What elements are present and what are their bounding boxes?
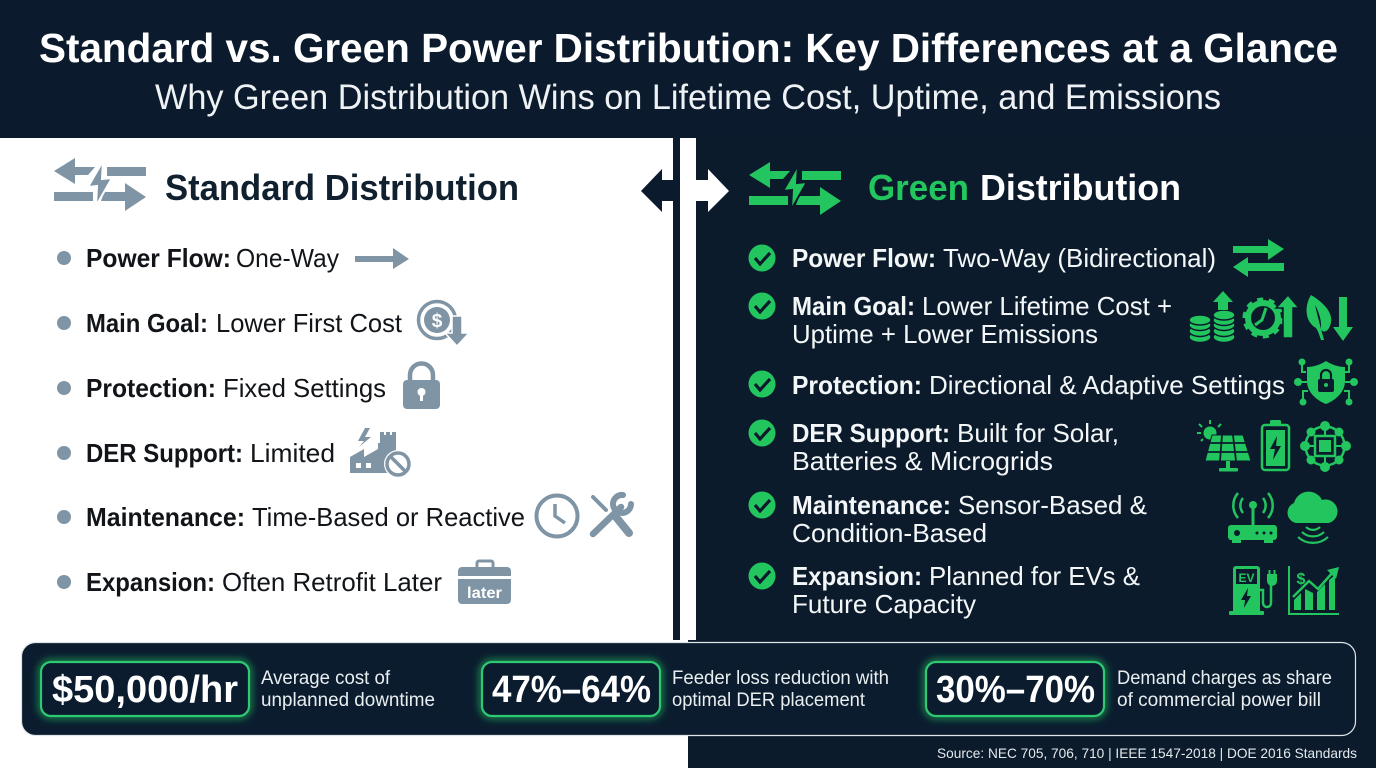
title: Standard vs. Green Power Distribution: Key Differences at a Glance — [39, 25, 1338, 71]
panel: standard list — [57, 243, 631, 604]
center divider with opposing arrows — [641, 138, 729, 640]
header band — [0, 0, 1376, 138]
row: main goal — [748, 291, 1172, 349]
row: protection: Protection: — [86, 373, 216, 403]
row: protection: Protection: — [792, 370, 922, 400]
icon: shield with lock and circuit nodes — [1295, 360, 1357, 404]
stat: feeder loss reduction — [482, 662, 889, 716]
stat: demand charges: 30%–70% — [936, 669, 1095, 711]
row: expansion: Expansion: — [792, 561, 922, 591]
row: maintenance: Maintenance: — [86, 502, 245, 532]
icon: later briefcase: later — [467, 585, 502, 602]
icon: two-way arrows — [1233, 239, 1284, 277]
row: protection: Directional & Adaptive Settings — [929, 370, 1285, 400]
icon: clock — [536, 496, 578, 536]
stat: downtime cost: $50,000/hr — [52, 669, 238, 711]
row: der support: Built for Solar, — [957, 418, 1119, 448]
icon: standard distribution arrows — [54, 158, 146, 211]
stat: feeder loss reduction: 47%–64% — [492, 669, 651, 711]
row: power flow: Power Flow: — [792, 243, 936, 273]
stat: downtime cost: unplanned downtime — [261, 690, 435, 711]
row: power flow — [748, 243, 1216, 273]
icon: wireless router — [1228, 493, 1277, 543]
row: expansion: Planned for EVs & — [929, 561, 1140, 591]
subtitle: Why Green Distribution Wins on Lifetime Cost, Uptime, and Emissions — [155, 78, 1221, 117]
stat: feeder loss reduction: Feeder loss reduction with — [672, 668, 889, 689]
heading: green distribution: Green — [868, 167, 969, 208]
row: maintenance — [57, 502, 525, 532]
icon: coin with down arrow: $ — [432, 311, 443, 332]
row: main goal: Main Goal: — [86, 308, 208, 338]
icon: later briefcase — [458, 561, 511, 604]
row: main goal — [57, 308, 403, 338]
icon: factory with prohibition sign — [350, 428, 412, 478]
row: der support — [748, 418, 1119, 476]
row: expansion — [57, 567, 442, 597]
row: protection: Fixed Settings — [223, 373, 386, 403]
row: der support: Batteries & Microgrids — [792, 446, 1053, 476]
stat: demand charges — [926, 662, 1332, 716]
icon: solar panel — [1197, 420, 1251, 472]
icon: coins with up arrow — [1189, 291, 1235, 342]
row: der support: Limited — [250, 438, 335, 468]
row: maintenance — [748, 490, 1147, 548]
row: expansion: Expansion: — [86, 567, 215, 597]
icon: microgrid chip network — [1300, 422, 1350, 472]
row: protection — [57, 373, 386, 403]
row: power flow: Two-Way (Bidirectional) — [943, 243, 1216, 273]
stat: downtime cost: Average cost of — [261, 668, 391, 689]
heading: green distribution: Distribution — [980, 167, 1181, 208]
row: expansion: Often Retrofit Later — [222, 567, 442, 597]
heading: green distribution — [868, 167, 1181, 208]
icon: padlock — [403, 364, 440, 409]
row: main goal: Main Goal: — [792, 291, 915, 321]
panel: right dark background — [688, 138, 1376, 768]
row: power flow: One-Way — [236, 243, 339, 273]
icon: leaf with down arrow — [1307, 295, 1353, 341]
row: der support: DER Support: — [86, 438, 243, 468]
source note: Source: NEC 705, 706, 710 | IEEE 1547-2018 | DOE 2016 Standards — [937, 745, 1357, 761]
row: expansion — [748, 561, 1140, 619]
stat: demand charges: of commercial power bill — [1117, 690, 1321, 711]
row: maintenance: Condition-Based — [792, 518, 987, 548]
icon: EV charger — [1229, 566, 1277, 615]
row: maintenance: Time-Based or Reactive — [252, 502, 525, 532]
row: der support — [57, 438, 335, 468]
stat: feeder loss reduction: optimal DER placement — [672, 690, 866, 711]
row: maintenance: Sensor-Based & — [958, 490, 1147, 520]
panel: green list — [748, 239, 1357, 619]
stats panel — [22, 642, 1356, 736]
row: main goal: Lower Lifetime Cost + — [922, 291, 1172, 321]
icon: cloud with signal — [1288, 492, 1338, 543]
heading: standard distribution: Standard Distribution — [165, 167, 519, 208]
icon: gear clock with up arrow — [1244, 295, 1299, 338]
row: main goal: Uptime + Lower Emissions — [792, 319, 1098, 349]
icon: coin with down arrow — [418, 302, 469, 346]
row: protection — [748, 370, 1285, 400]
stat: downtime cost — [41, 662, 435, 716]
icon: one-way arrow — [355, 248, 409, 269]
icon: battery — [1262, 420, 1289, 470]
row: power flow: Power Flow: — [86, 243, 231, 273]
icon: green distribution arrows — [749, 162, 841, 215]
icon: growth chart: $ — [1297, 571, 1306, 588]
icon: EV charger: EV — [1238, 571, 1255, 585]
row: expansion: Future Capacity — [792, 589, 976, 619]
row: power flow — [57, 243, 339, 273]
row: main goal: Lower First Cost — [216, 308, 403, 338]
icon: wrench and screwdriver — [593, 495, 631, 534]
row: maintenance: Maintenance: — [792, 490, 951, 520]
row: der support: DER Support: — [792, 418, 950, 448]
stat: demand charges: Demand charges as share — [1117, 668, 1332, 689]
icon: growth chart — [1289, 566, 1339, 614]
